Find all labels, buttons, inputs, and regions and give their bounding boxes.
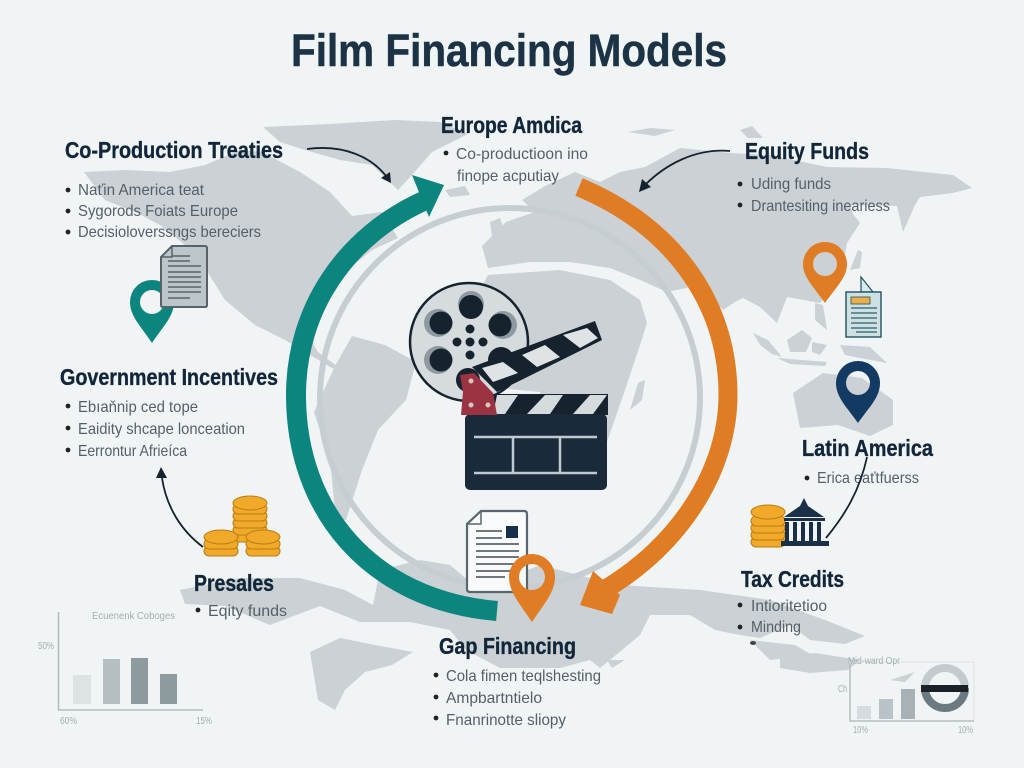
inner gray ring <box>320 208 700 588</box>
clapper board body <box>465 414 607 490</box>
bars <box>73 675 91 704</box>
heading: Equity Funds <box>745 138 869 164</box>
bullet list: finope acputiay <box>457 168 559 185</box>
heading: Latin America <box>802 435 933 461</box>
axes <box>58 612 203 710</box>
chart frame <box>850 662 974 721</box>
bullet list <box>444 146 588 185</box>
bars <box>857 706 871 719</box>
bullet list <box>738 598 827 645</box>
icon: bank building <box>781 498 829 546</box>
bullet list: Decisioloverssngs bereciers <box>78 224 261 241</box>
bullet list <box>434 668 601 729</box>
bullet list: Uding funds <box>751 176 831 193</box>
orange circular arrow <box>579 187 728 614</box>
bullet list: Eaidity shcape lonceation <box>78 421 245 438</box>
bullet list: Co-productioon ino <box>456 146 588 163</box>
panel: presales <box>194 570 287 620</box>
bullet list: Drantesiting ineariess <box>751 198 890 215</box>
bar chart: left: 15% <box>196 716 212 727</box>
panel: co-production treaties <box>65 137 283 241</box>
arrow: bank to latin america <box>826 457 867 538</box>
bar chart: left <box>38 611 212 727</box>
chart labels: Ecuenenk Coboges <box>92 611 175 622</box>
bullet list <box>738 176 890 215</box>
icon: treaty document <box>161 246 207 307</box>
icon: navy location pin <box>836 361 880 423</box>
clapper arm <box>456 321 602 392</box>
panel: tax credits <box>738 566 844 645</box>
bullet list <box>66 182 261 241</box>
icon: coin stacks <box>204 496 280 556</box>
title: Film Financing Models <box>291 25 727 76</box>
bullet list: Naťin America teat <box>78 182 205 199</box>
panel: europe amdica <box>441 112 588 185</box>
bullet list: Ampbartntielo <box>446 690 542 707</box>
bullet list: Ebıaňnip ced tope <box>78 399 198 416</box>
icon: orange location pin bottom <box>509 554 555 622</box>
bullet list: Sygorods Foiats Europe <box>78 203 238 220</box>
heading: Government Incentives <box>60 364 278 390</box>
icon: teal outlined document <box>846 277 881 337</box>
bar chart: left: 50% <box>38 641 54 652</box>
bullet list: Erica eaťtfuerss <box>817 470 919 487</box>
panel: government incentives <box>60 364 278 460</box>
arrow: coins to government incentives <box>156 467 203 547</box>
heading: Europe Amdica <box>441 112 582 138</box>
chart: bars and donut: 10% <box>958 725 973 736</box>
bullet list: Cola fimen teqlshesting <box>446 668 601 685</box>
heading: Tax Credits <box>741 566 844 592</box>
heading: Presales <box>194 570 274 596</box>
film reel and clapperboard icon <box>410 283 608 490</box>
chart: bars and donut <box>838 656 974 736</box>
heading: Co-Production Treaties <box>65 137 283 163</box>
bullet list: Eqity funds <box>208 603 287 620</box>
arrow: treaties to teal ring <box>307 148 391 183</box>
icon: orange location pin <box>803 242 847 303</box>
teal circular arrow <box>296 175 497 611</box>
bullet list <box>66 399 245 460</box>
film reel <box>410 283 528 401</box>
panel: gap financing <box>434 633 601 729</box>
clapper board top <box>470 394 608 415</box>
bullet list: Eerrontur Afrieíca <box>78 443 187 460</box>
chart: bars and donut: 10% <box>853 725 868 736</box>
chart: bars and donut: Ch <box>838 684 847 695</box>
arrow: equity funds to orange ring <box>639 151 730 192</box>
icon: financing document <box>467 511 527 592</box>
bullet list: Intioritetioo <box>751 598 827 615</box>
world map background <box>84 120 972 710</box>
donut <box>925 668 965 708</box>
panel: equity funds <box>738 138 890 215</box>
bullet list: Minding <box>751 619 801 636</box>
red hinge <box>460 373 497 415</box>
icon: teal location pin <box>130 280 174 343</box>
bar chart: left: 60% <box>60 716 77 727</box>
panel: latin america <box>802 435 933 487</box>
bullet list: Fnanrinotte sliopy <box>446 712 566 729</box>
icon: coins left of bank <box>751 505 785 547</box>
heading: Gap Financing <box>439 633 576 659</box>
chart labels: Mid-ward Opr <box>848 656 901 667</box>
